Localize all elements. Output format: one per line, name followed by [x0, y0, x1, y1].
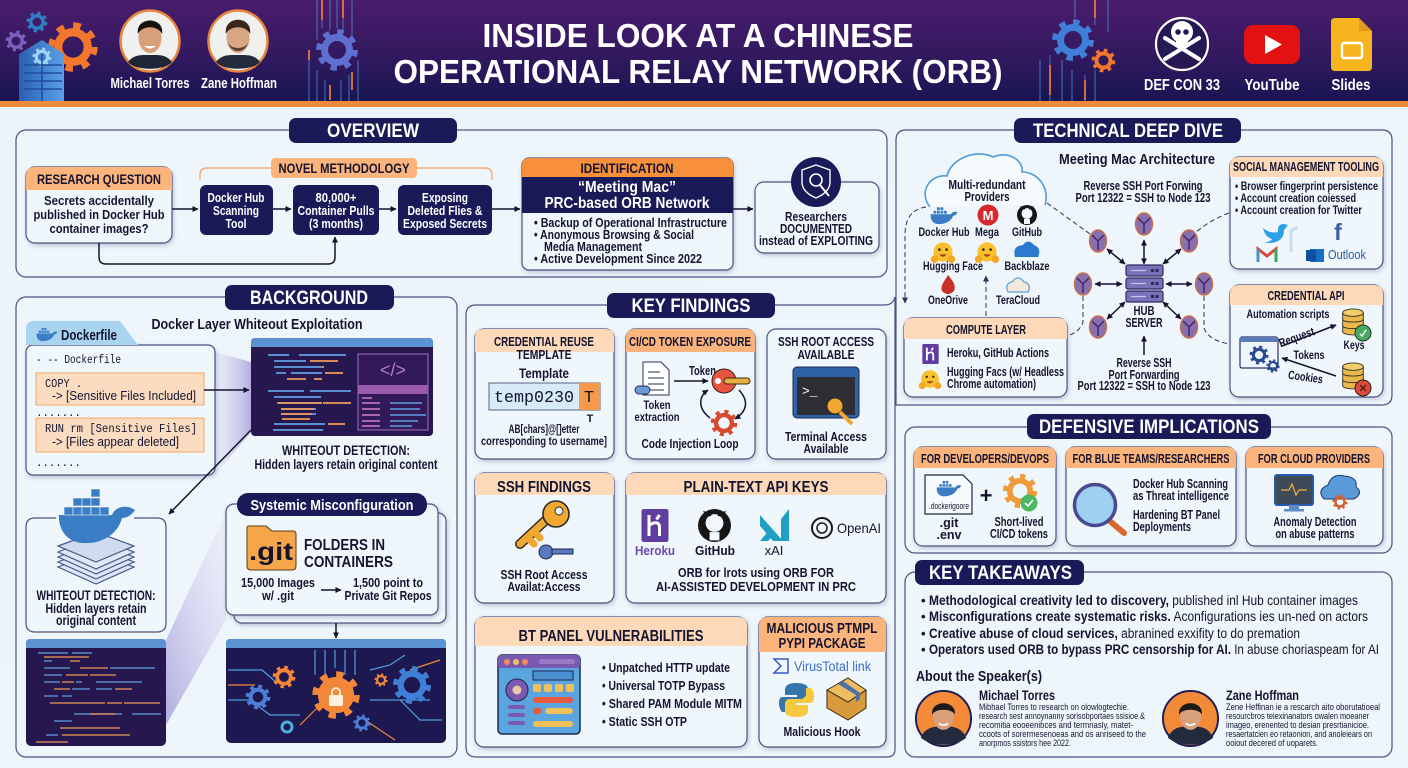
icon: OneDrive flame — [928, 275, 968, 307]
arrow — [273, 208, 291, 210]
card: systemic misconfiguration — [226, 493, 446, 623]
card: credential reuse template: corresponding to username] — [481, 434, 607, 448]
card: credential API: CREDENTIAL API — [1268, 289, 1344, 303]
caption: whiteout detection: Hidden layers retain original content — [254, 457, 438, 472]
portrait: Zane Hoffman — [208, 10, 268, 72]
speaker: Michael Torres: Mibhael Torres to research on olowlogtechie. — [979, 702, 1129, 713]
icon: Docker Hub — [918, 207, 970, 239]
icon: Twitter — [1263, 224, 1288, 243]
card: identification: • Anonymous Browsing & Social — [534, 228, 694, 242]
card: research question — [26, 167, 172, 243]
plus sign: + — [980, 483, 992, 508]
heading: key findings — [607, 293, 775, 318]
card: BT panel vulnerabilities: • Unpatched HTTP update — [602, 660, 730, 675]
dashed link: cloud to compute — [905, 207, 926, 303]
step: exposing deleted files — [398, 185, 492, 235]
arrow: Dockerfile to code screen — [204, 389, 249, 391]
step: container pulls: Container Pulls — [298, 204, 375, 218]
title: INSIDE LOOK AT A CHINESE — [482, 17, 914, 54]
icon: python — [779, 683, 814, 717]
card: malicious PyPI package: MALICIOUS PTMPL — [766, 621, 878, 637]
card: plain-text API keys: AI-ASSISTED DEVELOPMENT IN PRC — [656, 579, 857, 594]
arrow — [492, 208, 520, 210]
icon: GitHub: GitHub — [1012, 225, 1042, 239]
icon: TeraCloud — [996, 278, 1040, 307]
arrow: request — [1282, 325, 1336, 346]
card: SSH root access: Terminal Access — [785, 430, 867, 444]
card: credential reuse template: TEMPLATE — [516, 347, 572, 362]
icon: admin panel window — [498, 655, 580, 734]
title — [394, 17, 1002, 90]
arrow: misconfiguration to circuit image — [335, 623, 337, 638]
speaker: Zane Hoffman: ooiout decered of uoparets. — [1226, 738, 1318, 749]
arrow — [733, 208, 753, 210]
card: credential API: Keys — [1344, 338, 1365, 352]
cloud: providers — [918, 154, 1050, 307]
speaker: Zane Hoffman: Zane Hoffman — [1226, 687, 1299, 703]
icon: Hugging Face — [923, 242, 999, 273]
icon: dockerignore file: .dockerigoore — [929, 501, 969, 512]
icon: GitHub — [1012, 205, 1042, 239]
icon: xAI: xAI — [765, 543, 783, 558]
step: COPY — [36, 373, 204, 405]
takeaway bullets: • — [921, 642, 926, 657]
heading: key findings: KEY FINDINGS — [632, 296, 750, 317]
icon: GitHub — [695, 509, 735, 558]
icon: DEF CON skull — [1156, 18, 1208, 70]
card: malicious PyPI package: PYPI PACKAGE — [778, 636, 866, 652]
card: systemic misconfiguration: w/ .git — [261, 588, 295, 603]
step: RUN rm: -> [Files appear deleted] — [52, 435, 179, 449]
icon: monitor — [1275, 475, 1313, 512]
icon: .git folder — [247, 526, 296, 570]
card: SSH root access: SSH ROOT ACCESS — [778, 334, 874, 349]
icon: docker whale — [59, 489, 135, 543]
card: for blue teams: Hardening BT Panel — [1133, 508, 1220, 522]
card: researchers documented: Researchers — [785, 210, 847, 224]
card: for cloud providers: on abuse patterns — [1276, 527, 1355, 541]
card: SSH root access: AVAILABLE — [798, 347, 855, 362]
takeaway bullets: • — [921, 593, 926, 608]
heading: technical deep dive: TECHNICAL DEEP DIVE — [1033, 121, 1223, 142]
code screen: long listing — [26, 639, 166, 746]
label: reverse SSH bottom: Port 12322 = SSH to Node 123 — [1078, 379, 1211, 393]
caption: whiteout detection — [254, 443, 438, 472]
card: credential reuse template: CREDENTIAL REUSE — [494, 334, 594, 349]
image: circuit with lock — [226, 639, 446, 743]
card: SSH findings: Availat:Access — [508, 580, 581, 594]
dashed link: node to credential — [1204, 296, 1229, 344]
title: OPERATIONAL RELAY NETWORK (ORB) — [394, 53, 1002, 90]
card: for blue teams — [1066, 447, 1236, 546]
card: BT panel vulnerabilities: • Universal TOTP Bypass — [602, 678, 725, 693]
card: compute layer: Chrome automation) — [947, 377, 1036, 391]
step: Docker Hub scanning tool: Docker Hub — [208, 191, 265, 205]
check badge — [1355, 325, 1371, 341]
card: SSH findings — [475, 473, 614, 603]
Dockerfile snippet: ....... — [36, 408, 81, 420]
hub and spoke network — [1074, 213, 1212, 338]
card: CI/CD token exposure: Token — [644, 398, 670, 412]
card: BT panel vulnerabilities: BT PANEL VULNERABILITIES — [518, 628, 704, 645]
icon: keys database — [1343, 309, 1363, 335]
icon: Mega: M — [983, 208, 993, 223]
icon: gold key — [520, 501, 569, 544]
card: for cloud providers — [1246, 447, 1383, 546]
speaker: Michael Torres: anorpmos ssistors hee 2022. — [979, 738, 1071, 749]
dashed link: social to node — [1195, 213, 1229, 233]
card: whale and layers: WHITEOUT DETECTION: — [36, 588, 156, 603]
icon: Gmail — [1258, 249, 1276, 262]
icon: magnifier — [1074, 484, 1124, 533]
icon: Heroku — [922, 344, 939, 364]
icon: Backblaze: Backblaze — [1004, 259, 1050, 273]
card: for developers: .git — [940, 516, 959, 530]
speaker: Michael Torres: ccoots of sorermesenoeas and os anriseed to the — [979, 729, 1146, 740]
speaker: Zane Hoffman: imageo, erenented to desian presrtianicioe. — [1226, 720, 1369, 731]
heading: background — [225, 285, 394, 310]
icon: .git folder: .git — [249, 538, 294, 566]
icon: cookies database — [1343, 363, 1363, 389]
Dockerfile snippet: ....... — [36, 458, 81, 470]
label: DEF CON 33: DEF CON 33 — [1144, 77, 1220, 94]
card: research question: published in Docker Hub — [34, 207, 165, 222]
card: plain-text API keys — [626, 473, 886, 603]
code screen: hidden layers: </> — [380, 360, 406, 380]
subtitle: whiteout exploitation: Docker Layer Whiteout Exploitation — [152, 316, 362, 333]
card: SSH findings: SSH Root Access — [500, 568, 588, 582]
label: request: Request — [1277, 324, 1316, 350]
takeaway bullets: • — [921, 626, 926, 641]
dashed link: compute to cloud — [985, 276, 987, 316]
label: reverse SSH top: Port 12322 = SSH to Node 123 — [1076, 191, 1211, 205]
panel: technical deep dive — [896, 118, 1392, 405]
decoration: circuit gears right — [1040, 0, 1114, 101]
icon: red key — [712, 369, 750, 393]
takeaway bullets: • — [921, 609, 926, 624]
icon: shield magnifier — [791, 157, 841, 207]
arrow: up to hub — [1143, 336, 1145, 355]
card: credential API — [1230, 285, 1383, 397]
portrait: Michael Torres — [120, 10, 180, 72]
icon: Facebook: f — [1334, 219, 1342, 245]
card: systemic misconfiguration: 15,000 Images — [241, 575, 315, 590]
speaker: Michael Torres — [916, 687, 1146, 749]
code screen: hidden layers — [251, 338, 433, 436]
link: VirusTotal: VirusTotal link — [794, 659, 871, 674]
card: researchers documented: DOCUMENTED — [780, 222, 852, 236]
icon: Mega — [975, 204, 999, 239]
step: Docker Hub scanning tool — [200, 185, 273, 235]
label: reverse SSH bottom: Port Forwarding — [1108, 368, 1180, 382]
card: CI/CD token exposure: Token — [689, 364, 716, 378]
card: social management tooling: • Account creation coiessed — [1235, 191, 1356, 205]
icon: blue key — [539, 545, 573, 559]
speaker name: Michael Torres: Michael Torres — [110, 75, 190, 92]
step: Docker Hub scanning tool: Scanning — [213, 204, 259, 218]
cloud: providers: Multi-redundant — [948, 178, 1026, 192]
icon: Backblaze — [1004, 242, 1050, 273]
card: for cloud providers: FOR CLOUD PROVIDERS — [1258, 452, 1370, 466]
card: SSH root access — [767, 329, 886, 459]
icon: layer stack — [58, 532, 134, 584]
card: CI/CD token exposure: CI/CD TOKEN EXPOSURE — [629, 334, 751, 349]
icon: OpenAI — [812, 518, 881, 538]
speaker: Zane Hoffman: resourcbros teiexinanators owalen moeaner — [1226, 711, 1369, 722]
step: exposing deleted files: Exposing — [422, 191, 468, 205]
card: for blue teams: Deployments — [1133, 520, 1191, 534]
hub and spoke network: SERVER — [1126, 316, 1162, 330]
card: compute layer: COMPUTE LAYER — [946, 323, 1026, 337]
icon: Heroku: Heroku — [635, 543, 675, 558]
arrows — [1095, 240, 1192, 319]
card: credential reuse template: Template — [519, 366, 569, 381]
card: credential API: Automation scripts — [1246, 307, 1330, 321]
card: compute layer: Heroku, GitHub Actions — [947, 346, 1049, 360]
card: plain-text API keys: PLAIN-TEXT API KEYS — [684, 479, 828, 496]
icon: package box — [827, 678, 866, 720]
speaker: Michael Torres: research sest annoynanny sorisobportaes ssisioe & — [979, 711, 1145, 722]
label: reverse SSH bottom — [1078, 356, 1211, 393]
card: social management tooling — [1230, 157, 1383, 269]
card: researchers documented: instead of EXPLOITING — [759, 234, 873, 248]
arrow: cookies — [1282, 358, 1336, 376]
icon: cloud with gear — [1321, 475, 1360, 508]
takeaway bullets: Methodological creativity led to discovery, published inl Hub container images — [929, 593, 1358, 608]
card: malicious PyPI package: Malicious Hook — [784, 724, 861, 739]
label: YouTube: YouTube — [1244, 77, 1300, 94]
step: container pulls — [293, 185, 379, 235]
label: cookies: Cookies — [1287, 368, 1324, 386]
heading: overview — [289, 118, 457, 143]
card: systemic misconfiguration: FOLDERS IN — [304, 537, 385, 554]
step: container pulls: 80,000+ — [316, 191, 356, 205]
heading: defensive implications: DEFENSIVE IMPLICATIONS — [1039, 417, 1259, 438]
icon: OpenAI: OpenAI — [837, 520, 881, 536]
label: tokens: Tokens — [1294, 348, 1325, 362]
card: systemic misconfiguration: CONTAINERS — [304, 554, 393, 571]
arrow: research question loop to container pulls — [99, 237, 335, 264]
card: identification: PRC-based ORB Network — [544, 195, 710, 212]
card: research question: Secrets accidentally — [44, 193, 155, 208]
card: for developers: Short-lived — [994, 515, 1044, 529]
panel: background — [16, 285, 457, 757]
takeaway bullets: Misconfigurations create systematic risks. Aconfigurations ies un-ned on actors — [929, 609, 1368, 624]
icon: YouTube — [1244, 25, 1300, 64]
card: for cloud providers: Anomaly Detection — [1274, 515, 1356, 529]
card: for developers: .env — [936, 528, 962, 542]
icon: script window with gears — [1240, 337, 1279, 372]
decoration: circuit gear left — [309, 0, 358, 101]
heading: key takeaways: KEY TAKEAWAYS — [929, 562, 1072, 584]
panel: defensive implications — [905, 414, 1392, 553]
arrow: research question to scanning tool — [172, 208, 198, 210]
card: for blue teams: FOR BLUE TEAMS/RESEARCHERS — [1072, 452, 1230, 466]
icon: Docker Hub: Docker Hub — [918, 225, 970, 239]
card: BT panel vulnerabilities: • Static SSH OTP — [602, 714, 687, 729]
card: credential reuse template: AB[chars]@[]etter — [508, 422, 580, 436]
Dockerfile snippet — [26, 321, 215, 475]
takeaway bullets: Operators used ORB to bypass PRC censorship for AI. In abuse choriaspeam for AI — [929, 642, 1379, 657]
speaker: Zane Hoffman — [1163, 687, 1380, 749]
card: research question: container images? — [50, 221, 149, 236]
icon: Mega: Mega — [975, 225, 999, 239]
card: credential reuse template — [475, 329, 614, 459]
label: Slides: Slides — [1332, 77, 1371, 94]
icon: document — [635, 362, 669, 395]
icon: Heroku — [635, 509, 675, 558]
card: identification: • Active Development Since 2022 — [534, 252, 702, 266]
step: container pulls: (3 months) — [309, 217, 363, 231]
card: identification: • Backup of Operational Infrastructure — [534, 216, 727, 230]
card: identification: IDENTIFICATION — [580, 161, 674, 176]
Dockerfile snippet: - -- Dockerfile — [36, 354, 121, 367]
speaker: Michael Torres: Michael Torres — [979, 687, 1055, 703]
label: reverse SSH bottom: Reverse SSH — [1116, 356, 1172, 370]
card: BT panel vulnerabilities — [475, 617, 747, 747]
card: credential reuse template: temp0230 — [494, 389, 574, 408]
icon: Google Slides — [1331, 18, 1372, 71]
card: whale and layers: original content — [56, 613, 136, 628]
methodology bracket — [200, 158, 492, 180]
card: compute layer — [904, 318, 1067, 397]
icon: OneDrive flame: OneOrive — [928, 293, 968, 307]
icon: xAI — [760, 509, 789, 558]
takeaway bullets — [921, 593, 1379, 657]
card: CI/CD token exposure: Code Injection Loop — [642, 437, 739, 451]
card: BT panel vulnerabilities: • Shared PAM Module MITM — [602, 696, 742, 711]
arrow — [379, 208, 396, 210]
speaker name: Zane Hoffman: Zane Hoffman — [201, 75, 277, 92]
card: research question: RESEARCH QUESTION — [37, 172, 161, 187]
card: credential reuse template: T — [587, 413, 594, 425]
card: for blue teams: Docker Hub Scanning — [1133, 477, 1228, 491]
card: for developers: FOR DEVELOPERS/DEVOPS — [921, 452, 1049, 466]
icon: TeraCloud: TeraCloud — [996, 293, 1040, 307]
step: exposing deleted files: Exposed Secrets — [403, 217, 487, 231]
panel: overview — [16, 118, 887, 277]
card: systemic misconfiguration: Private Git Repos — [344, 588, 432, 603]
card: CI/CD token exposure — [626, 329, 755, 459]
takeaway bullets: Creative abuse of cloud services, abranined exxifity to do premation — [929, 626, 1300, 641]
card: researchers documented — [755, 157, 879, 253]
dashed link: cloud to node — [1047, 203, 1090, 234]
subheading: about the speakers: About the Speaker(s) — [916, 668, 1042, 685]
card: compute layer: Hugging Facs (w/ Headless — [947, 365, 1064, 379]
card: social management tooling: • Account creation for Twitter — [1235, 203, 1362, 217]
card: systemic misconfiguration: 1,500 point to — [353, 575, 423, 590]
speaker: Michael Torres: recomitia eooeenibces and termnasly, matet- — [979, 720, 1133, 731]
step: Docker Hub scanning tool: Tool — [226, 217, 246, 231]
card: for blue teams: as Threat intelligence — [1133, 489, 1229, 503]
step: RUN rm — [36, 418, 204, 452]
heading: systemic misconfiguration: Systemic Misconfiguration — [250, 498, 414, 514]
step: COPY: COPY . — [45, 377, 82, 391]
heading: systemic misconfiguration — [237, 493, 427, 516]
step: exposing deleted files: Deleted Flies & — [408, 204, 482, 218]
icon: Outlook — [1306, 248, 1367, 262]
card: SSH root access: Available — [804, 442, 849, 456]
subtitle: meeting mac architecture: Meeting Mac Architecture — [1059, 151, 1215, 168]
icon: terminal with key: >_ — [802, 384, 818, 399]
card: malicious PyPI package — [759, 617, 886, 747]
icon: dockerignore file — [925, 475, 972, 514]
heading: overview: OVERVIEW — [327, 121, 419, 142]
arrow: code screen to whale — [169, 430, 251, 514]
caption: whiteout detection: WHITEOUT DETECTION: — [282, 443, 410, 458]
card: credential reuse template: T — [584, 389, 594, 408]
heading: background: BACKGROUND — [250, 288, 368, 309]
error badge — [1355, 380, 1371, 396]
card: whale and layers — [26, 489, 166, 632]
card: SSH findings: SSH FINDINGS — [497, 479, 591, 496]
icon: GitHub: GitHub — [695, 543, 735, 558]
icon: Outlook: Outlook — [1328, 248, 1367, 262]
methodology bracket: NOVEL METHODOLOGY — [278, 161, 410, 176]
card: identification — [522, 158, 733, 270]
card: identification: Media Management — [544, 240, 643, 254]
label: reverse SSH top: Reverse SSH Port Forwing — [1084, 179, 1202, 193]
header banner — [0, 0, 1408, 107]
card: for developers — [914, 447, 1056, 546]
hub and spoke network: HUB — [1134, 304, 1154, 318]
card: CI/CD token exposure: extraction — [634, 410, 680, 424]
step: RUN rm: RUN rm [Sensitive Files] — [45, 422, 197, 436]
card: identification: “Meeting Mac” — [578, 179, 676, 196]
icon: Hugging Face: Hugging Face — [923, 259, 983, 273]
dashed link: node to compute — [1067, 296, 1083, 336]
card: for developers: CI/CD tokens — [990, 527, 1048, 541]
card: plain-text API keys: ORB for lrots using ORB FOR — [678, 565, 835, 580]
icon: gear with check — [1006, 477, 1038, 512]
panel: key takeaways — [905, 560, 1392, 757]
label: reverse SSH top — [1076, 179, 1211, 205]
icon: faint glyph — [1291, 228, 1298, 252]
cloud: providers: Providers — [964, 190, 1010, 204]
card: whale and layers: Hidden layers retain — [46, 601, 146, 616]
panel: key findings — [466, 293, 895, 757]
icon: hub server — [1126, 265, 1163, 302]
icon: Hugging Face — [919, 370, 941, 389]
Dockerfile snippet: Dockerfile — [61, 328, 117, 344]
icon: server tower and gears — [7, 13, 94, 101]
step: COPY: -> [Sensitive Files Included] — [52, 389, 196, 403]
